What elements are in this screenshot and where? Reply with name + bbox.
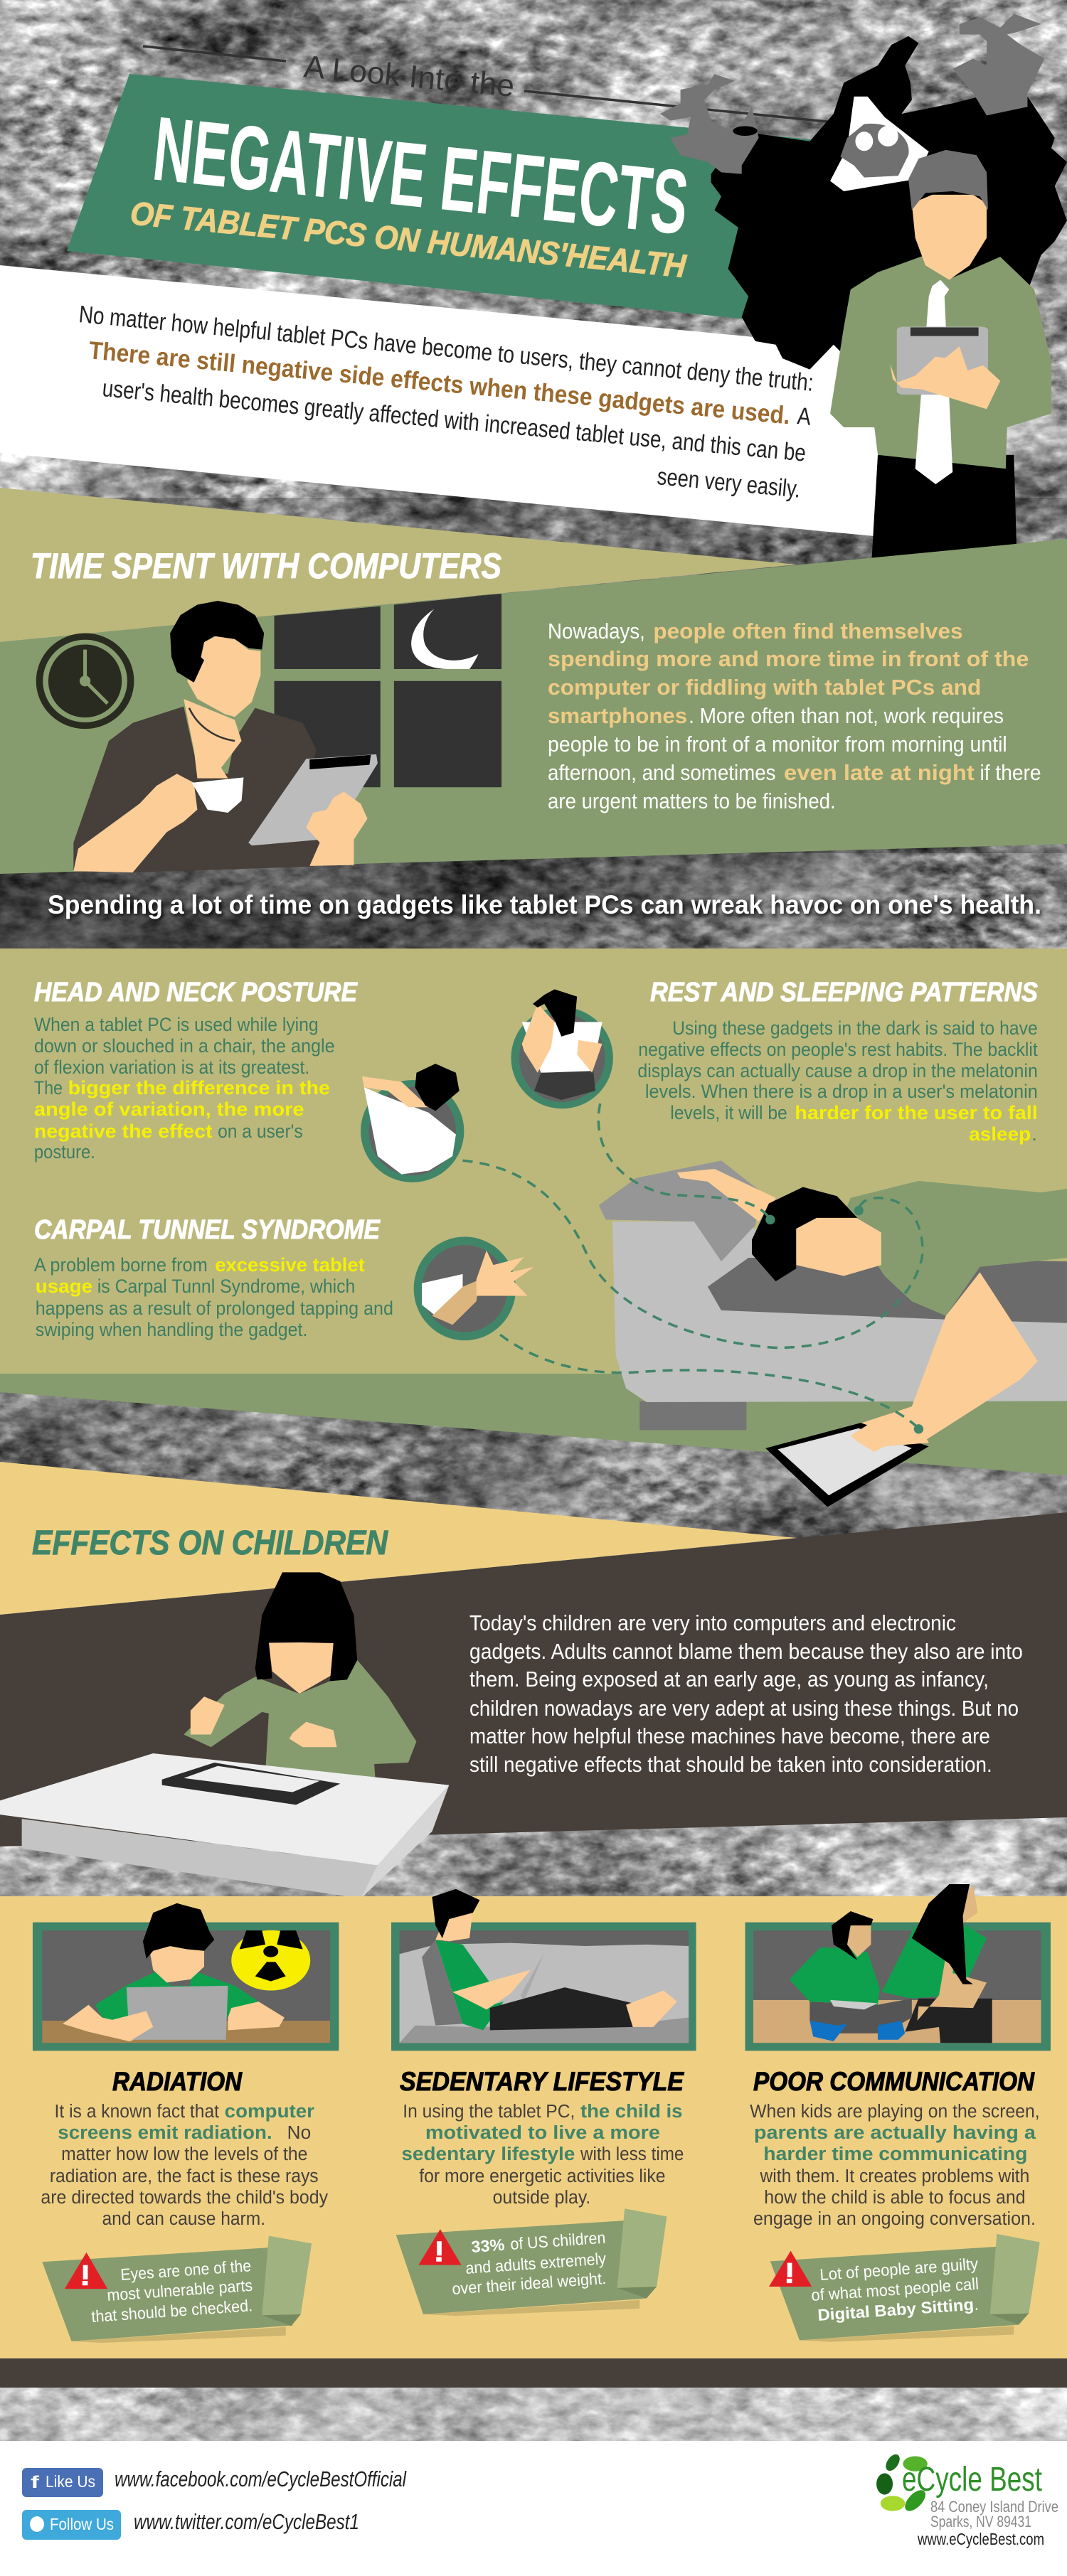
text block: time spent paragraph: people to be in front of a monitor from morning until <box>548 732 1007 757</box>
panel: posture section olive <box>0 948 1067 1374</box>
logo: eCycle Best: Sparks, NV 89431 <box>930 2513 1031 2530</box>
text block: carpal tunnel <box>34 1254 393 1340</box>
text block: children paragraph <box>469 1611 1023 1777</box>
text block: poor communication: with them. It creates problems with <box>760 2166 1029 2186</box>
text block: carpal tunnel: happens as a result of prolonged tapping and <box>36 1297 393 1319</box>
title: A Look Into the: A Look Into the <box>302 49 516 104</box>
text block: time spent paragraph: Nowadays, <box>548 619 645 643</box>
button: twitter follow: Follow Us <box>50 2515 114 2533</box>
button: facebook like: f <box>31 2473 40 2492</box>
frame illustration: poor communication <box>745 1884 1051 2051</box>
ribbon note: digital baby sitting: Digital Baby Sitting <box>817 2295 975 2324</box>
ribbon note: digital baby sitting: Lot of people are guilty <box>819 2254 979 2284</box>
callout: spending a lot of time: Spending a lot of time on gadgets like tablet PCs can wreak havoc on one's health. <box>48 890 1041 919</box>
text block: rest and sleeping: Using these gadgets in the dark is said to have <box>672 1017 1038 1039</box>
text block: time spent paragraph <box>548 619 1041 813</box>
panel: posture section green floor <box>0 1374 1067 1475</box>
text block: sedentary lifestyle <box>401 2102 684 2208</box>
title: Negative Effects: NEGATIVE EFFECTS <box>149 98 693 254</box>
ribbon note: digital baby sitting: of what most people call <box>811 2275 980 2304</box>
text block: intro paragraph: A <box>796 402 812 431</box>
text block: children paragraph: still negative effects that should be taken into consideration. <box>469 1753 992 1777</box>
title: A Look Into the <box>143 46 834 122</box>
heading: time spent with computers: TIME SPENT WITH COMPUTERS <box>31 546 501 586</box>
illustration: man with tablet <box>830 150 1051 572</box>
illustration: girl at table with tablet <box>0 1572 449 1898</box>
text block: radiation: radiation are, the fact is these rays <box>50 2166 319 2186</box>
text block: children paragraph: children nowadays are very adept at using these things. But no <box>469 1696 1019 1721</box>
text block: head and neck: negative the effect <box>34 1120 213 1142</box>
text block: rest and sleeping: harder for the user to fall <box>795 1101 1038 1123</box>
text block: rest and sleeping: . <box>1031 1123 1037 1145</box>
text block: head and neck: When a tablet PC is used while lying <box>34 1013 319 1035</box>
frame illustration: radiation <box>33 1903 339 2051</box>
text block: carpal tunnel: A problem borne from <box>34 1254 208 1276</box>
text block: poor communication: When kids are playing on the screen, <box>750 2102 1040 2122</box>
text block: rest and sleeping <box>637 1017 1038 1145</box>
ribbon note: digital baby sitting <box>769 2234 1040 2342</box>
ribbon note: eyes: Eyes are one of the <box>120 2256 252 2284</box>
text block: time spent paragraph: people often find themselves <box>653 619 963 643</box>
text block: time spent paragraph: if there <box>980 761 1041 785</box>
text block: children paragraph: them. Being exposed at an early age, as young as infancy, <box>469 1667 989 1691</box>
illustration: grim reaper <box>660 14 1067 370</box>
text block: time spent paragraph: even late at night <box>784 761 975 785</box>
text block: intro paragraph: user's health becomes greatly affected with increased tablet use, and this can be <box>101 375 807 467</box>
text block: time spent paragraph: afternoon, and sometimes <box>548 761 776 785</box>
text block: radiation <box>41 2102 328 2229</box>
text block: radiation: It is a known fact that <box>55 2102 219 2122</box>
ribbon note: 33 percent <box>396 2208 667 2316</box>
circle illustration: rest and sleep <box>511 989 613 1108</box>
text block: head and neck: of flexion variation is at its greatest. <box>34 1056 309 1078</box>
heading: head and neck posture: HEAD AND NECK POSTURE <box>34 978 358 1008</box>
frame illustration: sedentary lifestyle <box>391 1889 696 2051</box>
panel: intro white band <box>0 265 889 538</box>
circle illustration: carpal tunnel hand <box>414 1236 534 1340</box>
panel: time spent olive triangle <box>0 488 797 642</box>
heading: poor communication: POOR COMMUNICATION <box>753 2067 1035 2096</box>
text block: sedentary lifestyle: outside play. <box>493 2188 590 2208</box>
circle illustration: head and neck <box>361 1064 464 1182</box>
text block: poor communication: how the child is able to focus and <box>764 2188 1026 2208</box>
text block: carpal tunnel: usage <box>36 1275 92 1297</box>
ribbon note: 33 percent: 33% <box>471 2235 505 2256</box>
text block: sedentary lifestyle: for more energetic activities like <box>419 2166 666 2186</box>
panel: time spent green band <box>0 539 1067 874</box>
panel: effects yellow section <box>0 1896 1067 2358</box>
ribbon note: eyes <box>42 2236 312 2343</box>
heading: effects on children: EFFECTS ON CHILDREN <box>32 1524 388 1562</box>
panel: title banner <box>67 74 839 328</box>
text block: poor communication: engage in an ongoing conversation. <box>753 2209 1036 2229</box>
text block: intro paragraph <box>78 301 814 503</box>
text block: sedentary lifestyle: the child is <box>580 2102 682 2122</box>
ribbon note: 33 percent: over their ideal weight. <box>452 2269 607 2298</box>
text block: intro paragraph: No matter how helpful tablet PCs have become to users, they cannot deny the truth: <box>78 301 814 397</box>
text block: rest and sleeping: asleep <box>969 1123 1031 1145</box>
text block: sedentary lifestyle: motivated to live a more <box>425 2123 660 2143</box>
text block: carpal tunnel: is Carpal Tunnl Syndrome, which <box>97 1275 355 1297</box>
text block: intro paragraph: seen very easily. <box>656 463 802 503</box>
ribbon note: digital baby sitting: . <box>974 2295 979 2314</box>
text block: intro paragraph: There are still negative side effects when these gadgets are used. <box>87 336 792 429</box>
text block: children paragraph: matter how helpful these machines have become, there are <box>469 1724 990 1748</box>
subtitle: of tablet PCs on humans' health: OF TABLET PCS ON HUMANS'HEALTH <box>129 194 688 284</box>
text block: head and neck <box>34 1013 335 1163</box>
text block: head and neck: angle of variation, the more <box>34 1098 304 1120</box>
text block: head and neck: posture. <box>34 1140 95 1163</box>
text block: radiation: No <box>287 2123 311 2143</box>
illustration: man with coffee and tablet <box>73 601 378 872</box>
button: facebook like <box>22 2468 103 2497</box>
text block: rest and sleeping: levels. When there is a drop in a user's melatonin <box>645 1080 1038 1102</box>
text block: time spent paragraph: are urgent matters to be finished. <box>548 789 836 813</box>
text block: radiation: screens emit radiation. <box>58 2123 272 2143</box>
heading: carpal tunnel syndrome: CARPAL TUNNEL SYNDROME <box>34 1215 381 1245</box>
illustration: person lying on couch <box>599 1160 1067 1445</box>
heading: radiation: RADIATION <box>112 2067 243 2096</box>
text block: poor communication <box>750 2102 1040 2229</box>
icon: wall clock <box>36 633 134 729</box>
text block: time spent paragraph: smartphones <box>548 704 687 728</box>
text block: poor communication: parents are actually having a <box>754 2123 1036 2143</box>
dashed connector lines <box>462 1103 923 1433</box>
logo: eCycle Best <box>876 2454 1058 2548</box>
text block: time spent paragraph: spending more and more time in front of the <box>548 647 1029 671</box>
text block: head and neck: down or slouched in a chair, the angle <box>34 1035 335 1057</box>
panel: children yellow triangle <box>0 1462 797 1615</box>
button: twitter follow <box>22 2510 121 2540</box>
footer bar <box>0 2358 1067 2388</box>
text block: sedentary lifestyle: sedentary lifestyle <box>401 2144 575 2164</box>
link: facebook url: www.facebook.com/eCycleBestOfficial <box>115 2467 407 2491</box>
text block: radiation: computer <box>225 2102 314 2122</box>
ribbon note: eyes: most vulnerable parts <box>107 2276 253 2304</box>
illustration: night window and moon <box>275 594 501 787</box>
text block: children paragraph: gadgets. Adults cannot blame them because they also are into <box>469 1640 1023 1664</box>
link: twitter url: www.twitter.com/eCycleBest1 <box>134 2509 359 2534</box>
text block: poor communication: harder time communicating <box>763 2144 1027 2164</box>
text block: radiation: matter how low the levels of the <box>61 2144 307 2164</box>
text block: radiation: and can cause harm. <box>102 2209 265 2229</box>
text block: head and neck: The <box>34 1076 63 1099</box>
text block: rest and sleeping: displays can actually cause a drop in the melatonin <box>637 1059 1038 1081</box>
ribbon note: 33 percent: and adults extremely <box>465 2249 607 2277</box>
text block: radiation: are directed towards the child's body <box>41 2188 328 2208</box>
text block: carpal tunnel: excessive tablet <box>215 1254 365 1276</box>
text block: time spent paragraph: . More often than not, work requires <box>689 704 1004 728</box>
text block: time spent paragraph: computer or fiddling with tablet PCs and <box>548 675 981 700</box>
heading: sedentary lifestyle: SEDENTARY LIFESTYLE <box>400 2067 684 2096</box>
text block: carpal tunnel: swiping when handling the gadget. <box>36 1318 307 1340</box>
text block: sedentary lifestyle: In using the tablet PC, <box>403 2102 575 2122</box>
text block: sedentary lifestyle: with less time <box>580 2144 684 2164</box>
illustration: tablet held by sleeper <box>765 1423 929 1507</box>
button: facebook like: Like Us <box>46 2472 95 2491</box>
panel: children dark band <box>0 1512 1067 1847</box>
text block: head and neck: bigger the difference in the <box>68 1076 330 1099</box>
text block: rest and sleeping: levels, it will be <box>670 1101 787 1123</box>
ribbon note: 33 percent: of US children <box>510 2228 606 2253</box>
text block: head and neck: on a user's <box>218 1120 303 1142</box>
ribbon note: eyes: that should be checked. <box>91 2296 253 2326</box>
text block: children paragraph: Today's children are very into computers and electronic <box>469 1611 956 1635</box>
text block: rest and sleeping: negative effects on people's rest habits. The backlit <box>638 1038 1038 1060</box>
